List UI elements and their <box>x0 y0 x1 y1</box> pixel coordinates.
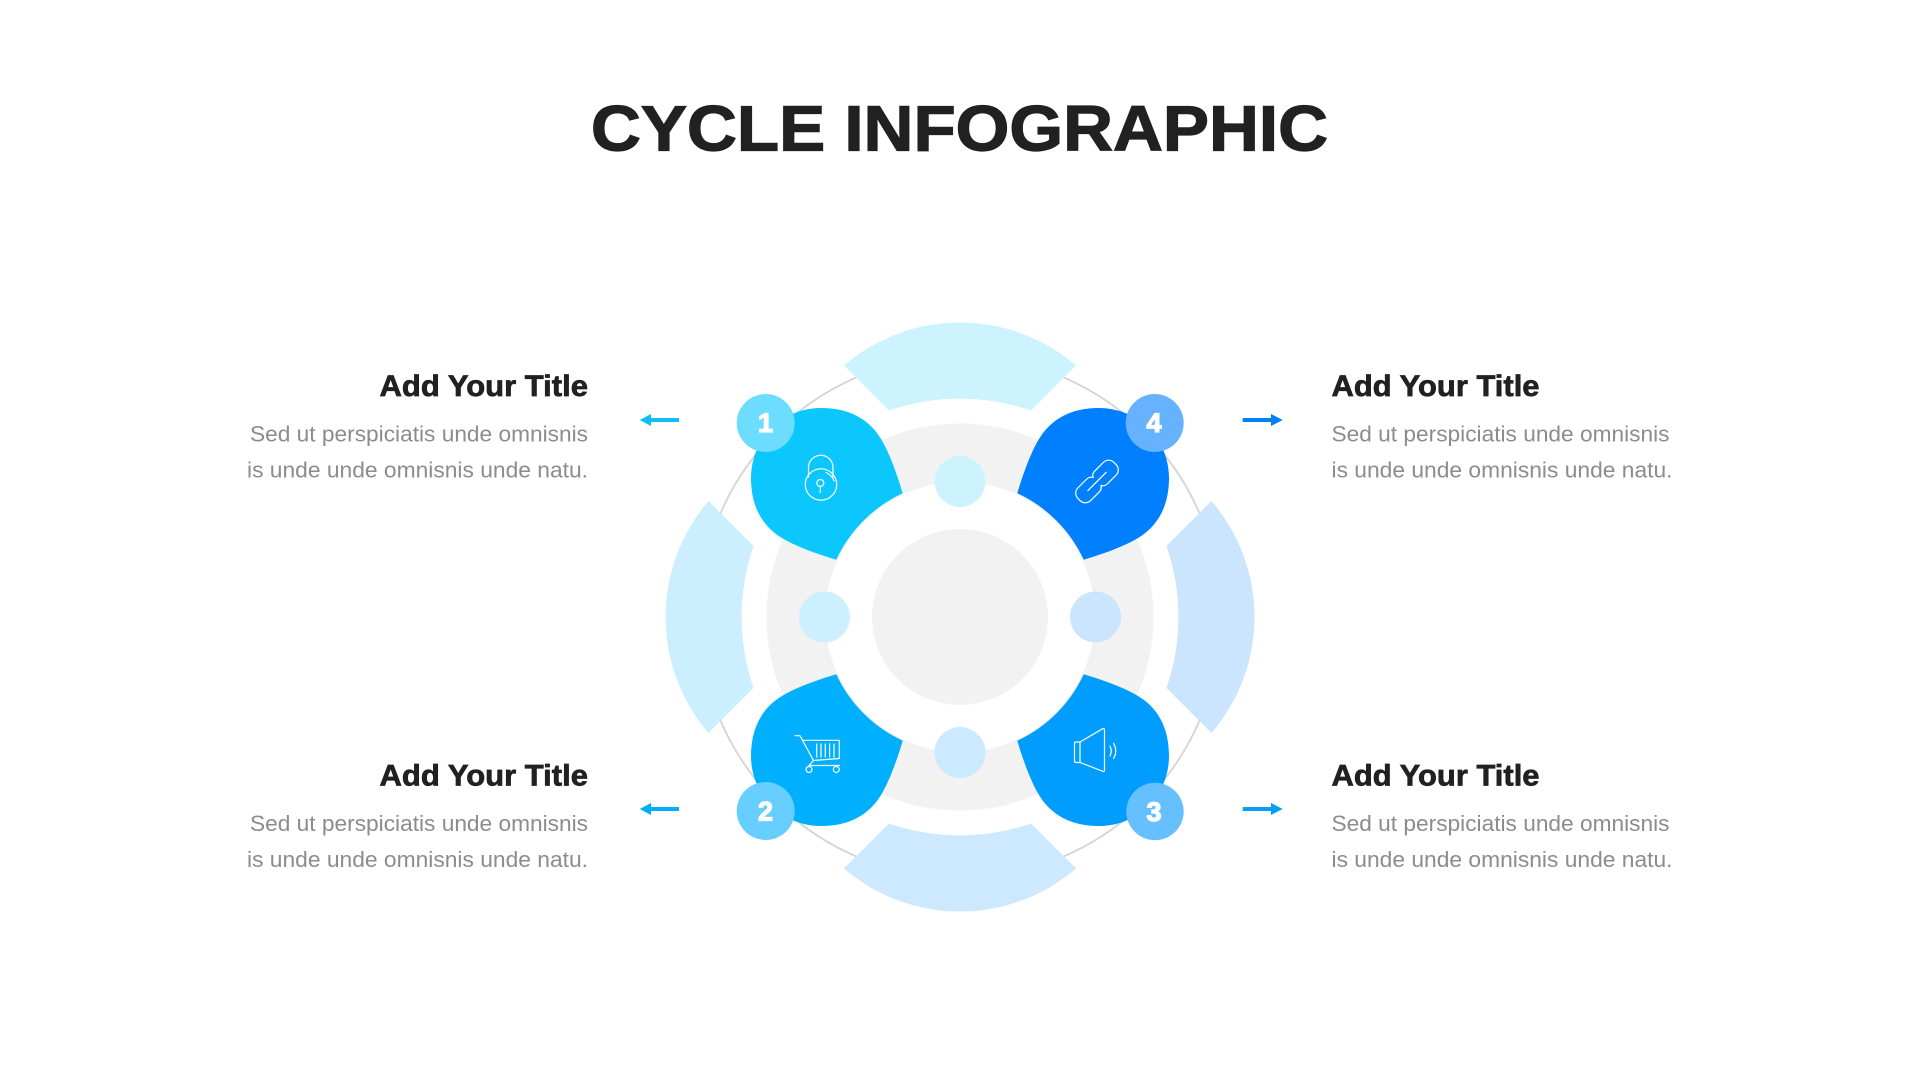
small circle left <box>799 592 850 642</box>
text block: top right: is unde unde omnisnis unde natu. <box>1332 458 1672 482</box>
small circle right <box>1070 592 1121 642</box>
badge 2 <box>737 782 795 840</box>
arrow: top right <box>1243 414 1283 426</box>
petal 1 <box>751 408 903 560</box>
badge 4: 4 <box>1146 408 1162 438</box>
icon: speaker <box>1074 728 1116 772</box>
badge 2: 2 <box>758 796 773 826</box>
icon: shopping cart <box>795 736 840 772</box>
text block: bottom left: Add Your Title <box>380 759 588 792</box>
text block: top left <box>247 370 588 482</box>
text block: top right <box>1332 370 1672 482</box>
title: CYCLE INFOGRAPHIC <box>591 92 1328 164</box>
petal 2 <box>751 674 903 826</box>
text block: bottom left: Sed ut perspiciatis unde omnisnis <box>250 811 588 836</box>
arrow: bottom left <box>640 803 679 815</box>
icon: padlock <box>805 455 837 500</box>
petal 3 <box>1017 674 1169 826</box>
grey centre circle <box>872 529 1048 705</box>
text block: bottom right <box>1332 759 1672 872</box>
icon: chain link <box>1073 457 1121 506</box>
text block: top left: Sed ut perspiciatis unde omnisnis <box>250 422 588 447</box>
arrow: bottom right <box>1243 803 1283 815</box>
text block: bottom right: is unde unde omnisnis unde natu. <box>1332 847 1672 872</box>
text block: bottom right: Sed ut perspiciatis unde omnisnis <box>1332 811 1670 836</box>
text block: top right: Add Your Title <box>1332 370 1540 403</box>
right band segment <box>1166 501 1254 733</box>
text block: bottom right: Add Your Title <box>1332 759 1540 792</box>
thin outer ring <box>699 356 1221 878</box>
cycle diagram <box>666 323 1254 911</box>
grey middle ring <box>796 453 1124 781</box>
badge 1 <box>737 394 795 452</box>
badge 1: 1 <box>758 408 773 438</box>
text block: top right: Sed ut perspiciatis unde omnisnis <box>1332 422 1670 447</box>
petal 4 <box>1017 408 1169 560</box>
badge 3: 3 <box>1146 797 1162 827</box>
text block: bottom left: is unde unde omnisnis unde natu. <box>247 847 588 872</box>
badge 3 <box>1126 783 1184 840</box>
small circle top <box>934 456 986 507</box>
badge 4 <box>1126 394 1184 452</box>
arrow: top left <box>640 414 679 426</box>
text block: bottom left <box>247 759 588 872</box>
bottom band segment <box>844 824 1076 911</box>
top band segment <box>844 323 1076 410</box>
left band segment <box>666 501 754 733</box>
small circle bottom <box>934 727 986 778</box>
text block: top left: Add Your Title <box>380 370 588 403</box>
text block: top left: is unde unde omnisnis unde natu. <box>247 458 588 482</box>
